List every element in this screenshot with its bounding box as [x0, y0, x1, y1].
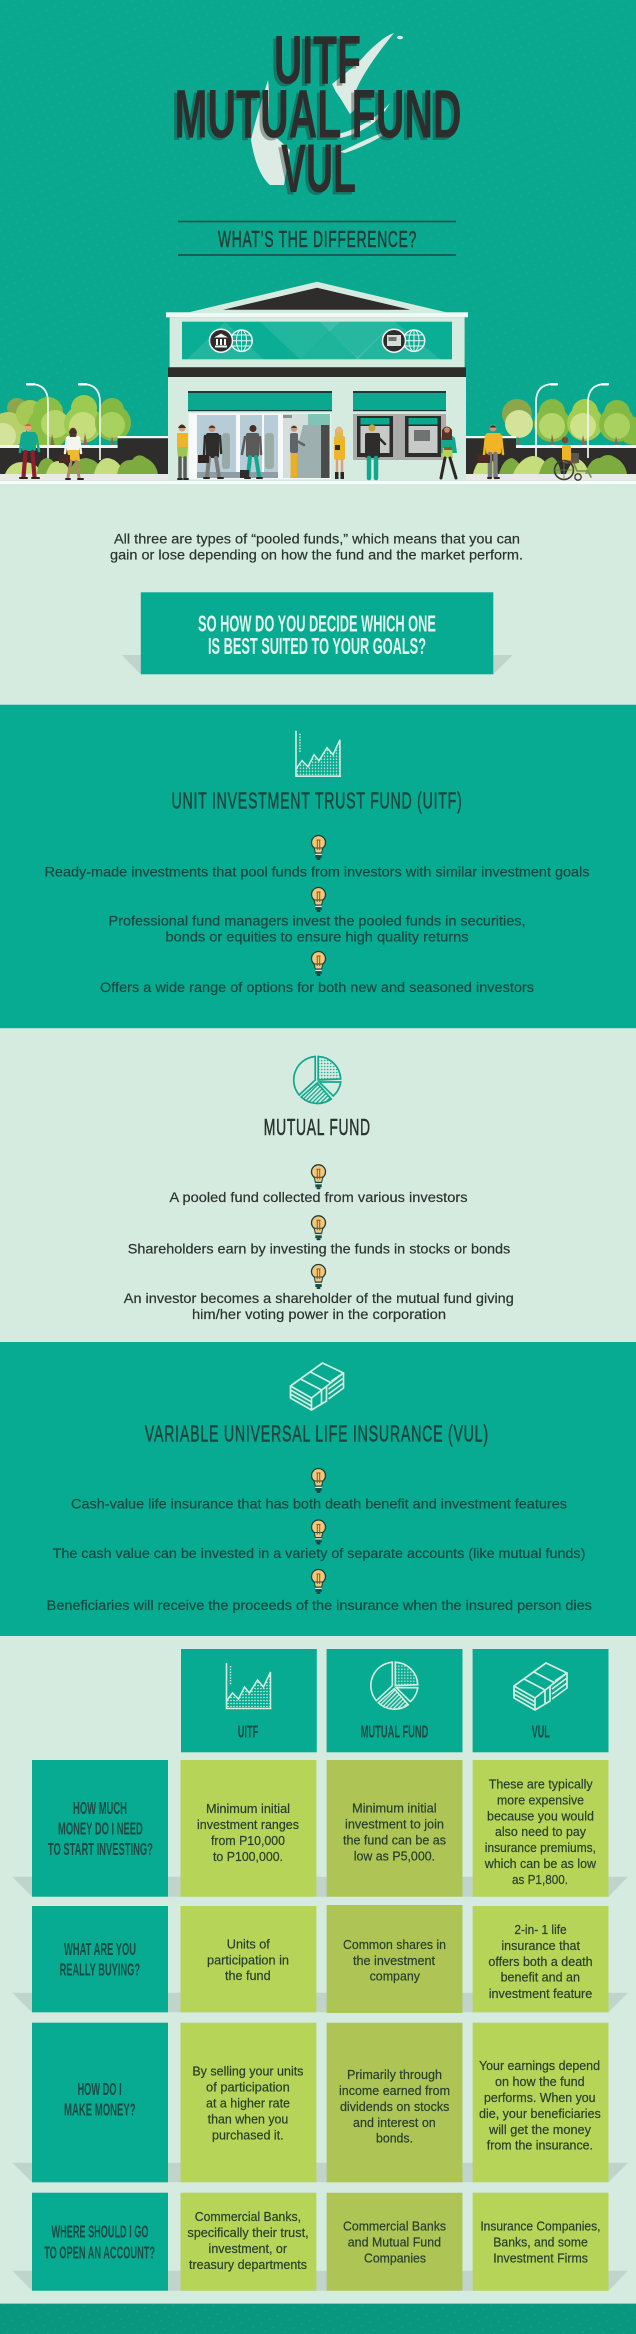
mutual fund cell: Minimum initial — [352, 1800, 437, 1816]
icon: bulb — [312, 1468, 326, 1493]
intro text: All three are types of “pooled funds,” which means that you can — [114, 532, 520, 546]
mutual fund cell: dividends on stocks — [340, 2099, 450, 2114]
street scene right: trees, lamps, walls, bushes — [466, 383, 636, 474]
intro text: gain or lose depending on how the fund and the market perform. — [110, 548, 523, 562]
UITF cell — [180, 1760, 316, 1897]
mutual fund cell: bonds. — [376, 2130, 413, 2146]
VUL cell — [473, 2193, 608, 2291]
icon: bulb — [312, 836, 326, 860]
awnings — [188, 391, 446, 411]
glass doors — [189, 413, 331, 479]
mutual fund cell: Commercial Banks — [343, 2218, 446, 2234]
VUL cell: investment feature — [489, 1986, 592, 2001]
question cell — [32, 1906, 168, 2012]
pediment — [189, 282, 446, 312]
mutual fund cell: the investment — [353, 1953, 435, 1968]
text: VUL point 2: The cash value can be invested in a variety of separate accounts (like mutual funds) — [53, 1546, 585, 1561]
VUL cell: on how the fund — [495, 2074, 585, 2089]
VUL cell: will get the money — [488, 2122, 591, 2137]
intro text — [110, 532, 523, 562]
text: mutual fund point 1: A pooled fund collected from various investors — [170, 1190, 468, 1205]
text: UITF point 2 — [108, 914, 526, 944]
VUL cell: insurance that — [501, 1938, 580, 1953]
title — [172, 21, 462, 210]
VUL cell — [473, 1906, 608, 2012]
icon: pie chart — [371, 1662, 418, 1709]
hero background — [0, 0, 636, 484]
heading: mutual fund: MUTUAL FUND — [264, 1114, 371, 1140]
icon: bulb — [312, 1520, 326, 1544]
mutual fund cell: company — [370, 1968, 420, 1984]
callout banner: SO HOW DO YOU DECIDE WHICH ONE — [198, 611, 436, 637]
VUL cell: benefit and an — [501, 1970, 580, 1984]
VUL cell: 2-in- 1 life — [514, 1922, 567, 1937]
person: woman on phone — [177, 424, 188, 479]
VUL cell: offers both a death — [488, 1954, 593, 1969]
VUL cell: from the insurance. — [487, 2138, 593, 2152]
text: mutual fund point 3: him/her voting power in the corporation — [192, 1307, 446, 1322]
panel: mutual fund — [0, 1028, 636, 1342]
title: UITF — [271, 24, 358, 101]
column header: VUL: VUL — [532, 1722, 550, 1742]
VUL cell: Your earnings depend — [479, 2058, 600, 2073]
street scene left: trees, lamps, walls, bushes — [0, 383, 168, 474]
question cell — [32, 2193, 168, 2291]
question cell: HOW MUCH — [73, 1798, 127, 1818]
person: man using ATM — [365, 424, 385, 478]
UITF cell: By selling your units — [192, 2064, 304, 2078]
mutual fund cell — [327, 1905, 462, 2013]
mutual fund cell: Primarily through — [347, 2067, 442, 2082]
callout banner — [122, 592, 513, 674]
icon: line chart — [226, 1663, 272, 1708]
UITF cell: treasury departments — [189, 2257, 307, 2272]
panel: UITF — [0, 705, 636, 1028]
column header: UITF — [181, 1649, 317, 1752]
icon: bulb — [312, 952, 326, 976]
VUL cell — [473, 2023, 608, 2182]
text: VUL point 3: Beneficiaries will receive the proceeds of the insurance when the insured person dies — [47, 1598, 592, 1613]
UITF cell: Commercial Banks, — [195, 2209, 301, 2224]
text: mutual fund point 3 — [124, 1291, 514, 1322]
row: what are you buying — [32, 1905, 608, 2013]
mutual fund cell: income earned from — [339, 2083, 450, 2098]
text: mutual fund point 3: An investor becomes a shareholder of the mutual fund giving — [124, 1291, 514, 1306]
VUL cell: performs. When you — [484, 2090, 596, 2105]
mutual fund cell — [327, 1760, 462, 1897]
VUL cell: because you would — [487, 1808, 594, 1824]
UITF cell: to P100,000. — [213, 1849, 283, 1864]
UITF cell: participation in — [207, 1952, 289, 1968]
VUL cell: insurance premiums, — [485, 1840, 596, 1855]
icon: stack of bills — [514, 1663, 567, 1710]
callout banner: IS BEST SUITED TO YOUR GOALS? — [208, 633, 426, 659]
people — [20, 424, 591, 480]
row: how much money — [32, 1760, 608, 1897]
mutual fund cell: and interest on — [353, 2115, 436, 2130]
mutual fund cell: and Mutual Fund — [348, 2234, 441, 2250]
VUL cell — [473, 1760, 608, 1897]
row: where to open an account — [32, 2193, 608, 2291]
UITF cell: Minimum initial — [206, 1801, 290, 1816]
UITF cell: from P10,000 — [211, 1833, 285, 1848]
sidewalk — [0, 474, 636, 484]
icon: bank and globe — [210, 329, 252, 352]
mutual fund cell: the fund can be as — [343, 1832, 446, 1848]
person: woman in teal jacket — [441, 426, 457, 478]
UITF cell — [180, 2193, 316, 2291]
brush stroke behind title — [251, 33, 403, 185]
icon: pie chart — [294, 1056, 341, 1103]
question cell — [32, 1760, 168, 1897]
VUL cell: die, your beneficiaries — [479, 2106, 601, 2121]
VUL cell: also need to pay — [495, 1824, 586, 1839]
person: man in gray jacket and teal trousers — [240, 425, 262, 478]
UITF cell: of participation — [206, 2080, 290, 2094]
mutual fund cell: investment to join — [345, 1816, 444, 1832]
heading: UITF: UNIT INVESTMENT TRUST FUND (UITF) — [172, 787, 462, 813]
mutual fund cell: low as P5,000. — [354, 1848, 435, 1864]
subtitle: WHAT’S THE DIFFERENCE? — [218, 226, 417, 252]
column header: UITF: UITF — [238, 1722, 258, 1742]
column header: mutual fund — [327, 1649, 462, 1752]
column header: mutual fund: MUTUAL FUND — [361, 1722, 428, 1742]
icon: bulb — [312, 1264, 326, 1289]
person: man at bank counter — [290, 425, 304, 478]
question cell: HOW DO I — [78, 2079, 122, 2099]
row: how do I make money — [32, 2023, 608, 2182]
panel: comparison table — [12, 1649, 628, 2291]
question cell: REALLY BUYING? — [60, 1960, 140, 1980]
person: man in teal sweater — [20, 424, 39, 478]
title: VUL — [281, 130, 356, 207]
sign board — [182, 322, 452, 359]
icon: bulb — [312, 1165, 326, 1189]
bank building — [166, 282, 468, 481]
ATM bay — [353, 414, 446, 460]
UITF cell — [180, 2023, 316, 2182]
cornice and upper wall — [166, 312, 468, 481]
VUL cell: which can be as low — [484, 1856, 597, 1871]
question cell: MONEY DO I NEED — [58, 1818, 143, 1838]
text: VUL point 1: Cash-value life insurance that has both death benefit and investment features — [71, 1496, 567, 1512]
mutual fund cell: Companies — [364, 2250, 426, 2266]
title: VUL — [278, 132, 353, 210]
icon: bulb — [312, 1216, 326, 1240]
person: woman in white blouse with briefcase — [59, 428, 83, 479]
table ribbons — [12, 1877, 628, 2291]
VUL cell: These are typically — [489, 1776, 593, 1792]
mutual fund cell: Common shares in — [343, 1937, 446, 1952]
mutual fund cell — [327, 2193, 462, 2291]
text: UITF point 1: Ready-made investments that pool funds from investors with similar investment goals — [44, 864, 590, 880]
question cell: MAKE MONEY? — [64, 2100, 136, 2120]
question cell: TO OPEN AN ACCOUNT? — [44, 2242, 155, 2262]
footer strip — [0, 2303, 636, 2334]
icon: stack of bills — [290, 1363, 344, 1410]
VUL cell: Insurance Companies, — [480, 2218, 600, 2234]
text: UITF point 2: Professional fund managers invest the pooled funds in securities, — [108, 914, 526, 928]
panel: hero header — [0, 0, 636, 484]
text: mutual fund point 2: Shareholders earn by investing the funds in stocks or bonds — [128, 1242, 511, 1256]
icon: bulb — [312, 888, 326, 912]
UITF cell: specifically their trust, — [187, 2225, 309, 2240]
icon: line chart — [296, 731, 341, 776]
panel: VUL — [0, 1342, 636, 1636]
UITF cell: investment, or — [209, 2241, 288, 2256]
column header: VUL — [473, 1649, 608, 1752]
question cell — [32, 2023, 168, 2182]
UITF cell: at a higher rate — [206, 2096, 290, 2110]
question cell: WHAT ARE YOU — [64, 1939, 136, 1959]
icon: bulb — [312, 1570, 326, 1594]
UITF cell: Units of — [227, 1936, 270, 1952]
person: man in black jacket with briefcase — [198, 425, 223, 478]
UITF cell: purchased it. — [212, 2128, 284, 2142]
text: UITF point 2: bonds or equities to ensure high quality returns — [166, 930, 469, 944]
VUL cell: Investment Firms — [493, 2250, 588, 2266]
question cell: WHERE SHOULD I GO — [52, 2221, 148, 2241]
person: man in yellow sweater with briefcase — [478, 424, 503, 478]
person: woman in yellow dress — [334, 426, 345, 479]
VUL cell: more expensive — [497, 1792, 584, 1808]
text: UITF point 3: Offers a wide range of options for both new and seasoned investors — [100, 980, 534, 995]
UITF cell: investment ranges — [197, 1817, 299, 1832]
mutual fund cell — [327, 2023, 462, 2182]
VUL cell: Banks, and some — [493, 2234, 588, 2250]
UITF cell — [180, 1906, 316, 2012]
VUL cell: as P1,800. — [512, 1872, 568, 1887]
UITF cell: the fund — [225, 1968, 271, 1983]
title: UITF — [274, 21, 361, 98]
person: wheelchair user — [554, 437, 591, 480]
icon: news and globe — [382, 329, 425, 352]
question cell: TO START INVESTING? — [48, 1839, 153, 1859]
UITF cell: than when you — [208, 2112, 288, 2126]
